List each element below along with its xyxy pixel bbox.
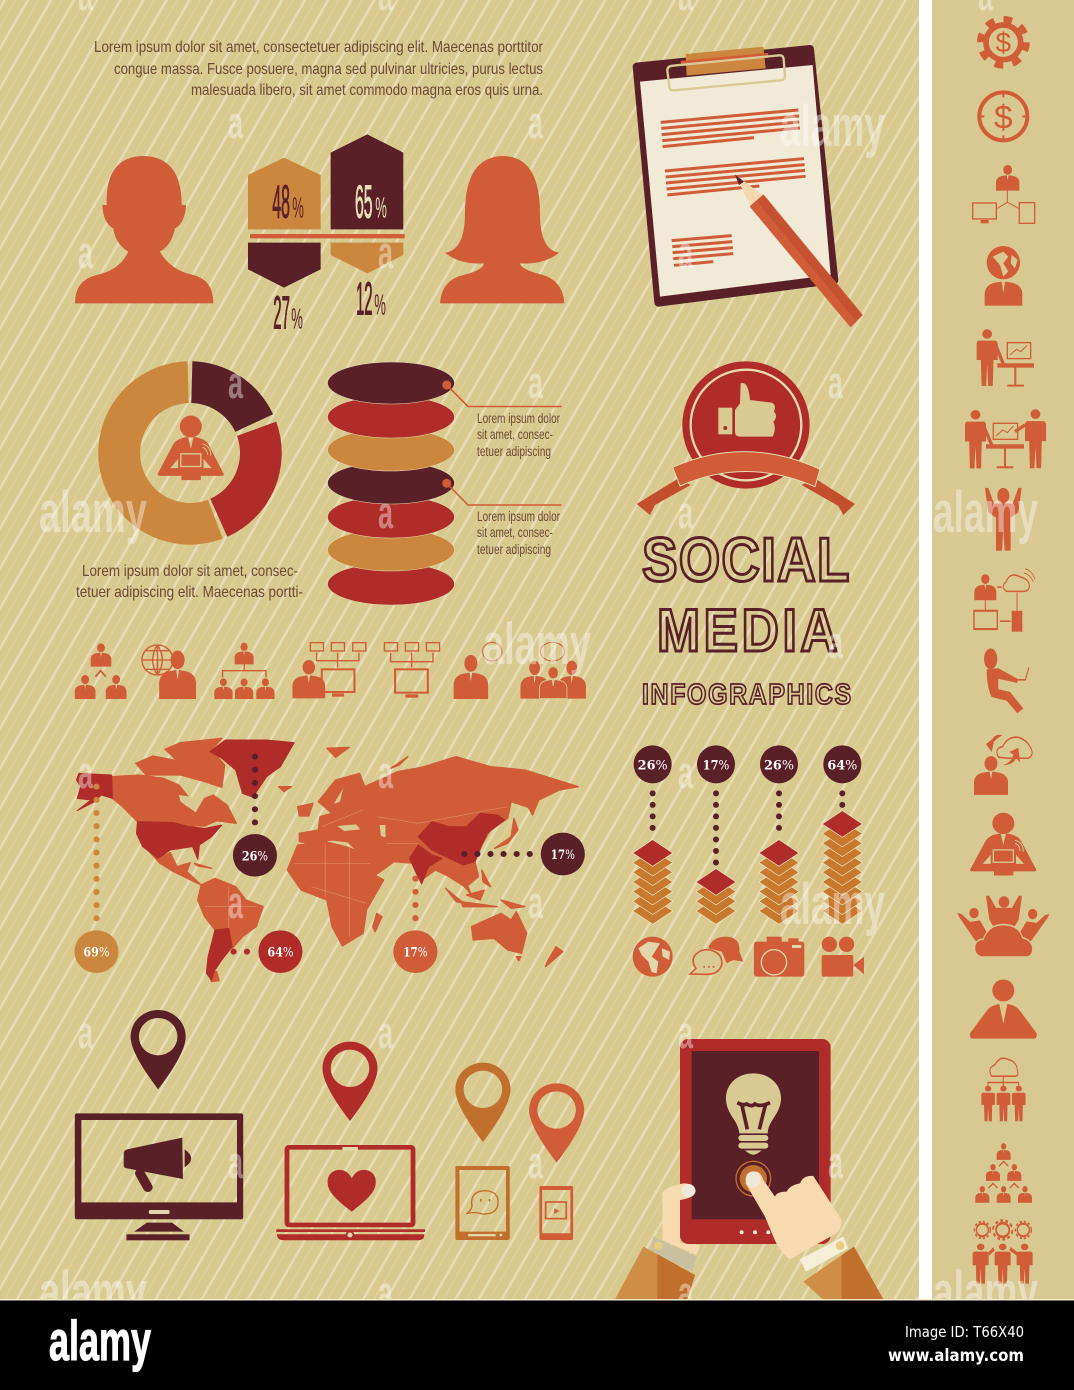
panel: layered diamond chart [633,745,864,977]
watermarks: a [228,1137,244,1188]
watermarks: a [528,357,544,408]
icon: orange pin [529,1083,584,1163]
hexagon 65 percent: 65 [355,175,373,227]
watermarks: alamy [483,612,591,677]
intro text: Lorem ipsum dolor sit amet, consectetuer adipiscing elit. Maecenas porttitor [94,39,544,56]
donut caption: Lorem ipsum dolor sit amet, consec- [82,563,298,580]
icon: light bulb [726,1073,781,1155]
map callout 69 percent [74,787,119,973]
icon: gear with dollar [980,19,1026,65]
icon: two people at chart desk [965,409,1046,468]
watermarks: a [378,227,394,278]
icon: person seated with laptop [984,648,1029,713]
icon: desktop monitor with megaphone [75,1113,243,1240]
left hand [615,1183,700,1299]
column 1 [633,745,673,924]
tablet body [680,1039,831,1244]
pencil [735,174,862,326]
map callout 17 percent east [464,833,585,875]
donut segment maroon [191,361,273,432]
watermarks: a [828,1137,844,1188]
ribbon [637,452,855,515]
icon: person with globe head [985,246,1022,306]
people and network icon row [75,642,586,699]
column 2 [696,745,736,924]
watermarks: alamy [39,480,147,545]
white divider [919,0,932,1300]
watermarks: a [228,97,244,148]
icon: person arms raised [985,488,1022,551]
map callout 17 percent south: 17% [403,945,428,961]
map: inland water [179,788,385,837]
panel: donut chart [98,361,282,545]
panel: stacked discs [328,362,454,605]
icon: group with speech bubble [520,642,586,699]
donut caption: tetuer adipiscing elit. Maecenas portti- [76,584,303,601]
icon: gear with dollar: $ [996,27,1012,58]
panel: thumbs up badge [637,361,855,515]
icon: person with monitor network [292,643,366,698]
title: social media infographics: INFOGRAPHICS [642,678,853,710]
donut caption [76,563,303,601]
donut segment red [210,422,282,537]
watermarks: a [528,877,544,928]
icon: male silhouette [75,156,213,303]
column 3: 26% [764,757,794,773]
site url: www.alamy.com [888,1346,1024,1366]
column 2: 17% [703,757,729,773]
lower hexagon 27 percent [248,243,321,338]
icon: female silhouette [440,156,564,303]
footer logo: alamy [49,1309,151,1372]
column 3 [759,745,799,924]
icon: person with speech bubble [454,642,502,699]
lower hexagon 12 percent [331,243,403,324]
paper [640,65,831,297]
hexagon 48 percent: % [292,192,304,224]
image id: Image ID: T66X40 [905,1323,1024,1341]
watermarks: a [78,1007,94,1058]
intro text [94,39,544,99]
callout 1: sit amet, consec- [477,427,553,442]
icon: laptop with heart [276,1147,425,1240]
lower hexagon 12 percent: 12 [356,272,373,324]
clip [667,47,785,90]
icon: thumbs up [718,383,776,437]
lower hexagon 27 percent: % [291,303,303,335]
icon: person with cloud sync [974,735,1032,795]
icon: person with cloud network [974,569,1035,632]
icon: team with cloud [957,896,1049,957]
icon: cloud with three people [981,1058,1026,1121]
column 1: 26% [638,757,668,773]
icon: team with gears [973,1221,1033,1284]
callout 1: Lorem ipsum dolor [477,411,560,426]
callout 2: Lorem ipsum dolor [477,509,560,524]
panel: devices and location pins [75,1010,584,1240]
icon: person and devices [973,165,1035,223]
touch button [736,1161,771,1196]
watermarks: a [678,487,694,538]
callout 2: tetuer adipiscing [477,542,551,557]
watermarks: a [378,1267,394,1318]
right icon column background [932,0,1074,1300]
intro text: congue massa. Fusce posuere, magna sed pulvinar ultricies, purus lectus [114,61,543,78]
icon: team of three [75,643,126,699]
badge circle [682,361,810,489]
hexagon 65 percent [331,134,403,229]
hexagon 48 percent [248,158,321,229]
icon: speech bubbles [690,937,743,974]
map callout 64 percent [234,930,302,973]
icon: person at chart desk [977,329,1034,387]
hexagon 48 percent: 48 [272,175,290,227]
callout 1: tetuer adipiscing [477,444,551,459]
watermarks: a [378,747,394,798]
icon: brown pin [455,1063,510,1142]
icon: monitor network [384,643,440,696]
column 4 [822,745,862,924]
footer bar [0,1299,1074,1390]
icon: globe [633,937,673,977]
callout 1 [442,380,562,459]
lower hexagon 27 percent: 27 [273,286,290,338]
watermarks: a [528,1137,544,1188]
map callout 69 percent: 69% [83,945,110,961]
title: social media infographics: MEDIA [657,596,841,664]
lower hexagon 12 percent: % [374,289,386,321]
clipboard board [637,49,834,303]
panel: clipboard with pencil [637,47,862,326]
right column icons lower [957,488,1049,1284]
panel: world map [74,738,585,982]
title: social media infographics [642,526,853,710]
map callout 17 percent south [393,879,437,973]
watermarks: a [228,877,244,928]
map callout 17 percent east: 17% [551,847,575,863]
icon: tablet with chat bubble [455,1166,510,1240]
watermarks: a [78,227,94,278]
callout 2 [442,479,562,557]
right column icons upper [965,19,1046,468]
map: highlighted countries [77,740,505,980]
title: social media infographics: SOCIAL [642,526,851,595]
watermarks: a [678,747,694,798]
icon: red pin [322,1042,378,1121]
tablet screen [692,1051,819,1219]
watermarks: alamy [780,94,885,159]
watermarks: a [678,227,694,278]
icon: person bust large [970,979,1037,1039]
icon: clock with dollar [979,92,1027,140]
map: highlighted regions and land [112,738,578,982]
icon: person with tablet [157,416,224,480]
watermarks: a [678,1007,694,1058]
text lines [661,110,806,265]
panel: gender statistics [75,134,564,338]
watermarks: alamy [780,872,885,937]
watermarks: a [378,487,394,538]
watermarks: a [828,617,844,668]
intro text: malesuada libero, sit amet commodo magna eros quis urna. [191,82,543,99]
watermarks: a [678,1267,694,1318]
icon: video camera [822,937,864,977]
callout 2: sit amet, consec- [477,525,553,540]
centre bar [250,234,405,238]
donut segment orange [98,361,223,545]
tablet dots [740,1230,770,1234]
watermarks: alamy [39,1260,147,1325]
icon: person with tablet [970,813,1036,876]
watermarks: a [528,97,544,148]
watermarks: a [228,357,244,408]
map callout 26 percent: 26% [242,849,268,864]
watermarks: a [828,357,844,408]
icon: pyramid org [975,1143,1032,1203]
map: borders [205,807,508,937]
watermarks: a [78,747,94,798]
icon: maroon pin [131,1010,186,1089]
icon: person with globe [142,645,196,699]
right hand [746,1171,883,1299]
icon: org chart [214,643,275,699]
icon: camera [754,937,804,977]
icon: clock with dollar: $ [994,99,1013,136]
hexagon 65 percent: % [375,192,387,224]
column 4: 64% [827,757,857,773]
map callout 26 percent [233,757,277,877]
panel: hands holding tablet [615,1039,883,1299]
icon: phone with video [539,1186,573,1240]
watermarks: a [378,1007,394,1058]
map callout 64 percent: 64% [267,945,294,961]
